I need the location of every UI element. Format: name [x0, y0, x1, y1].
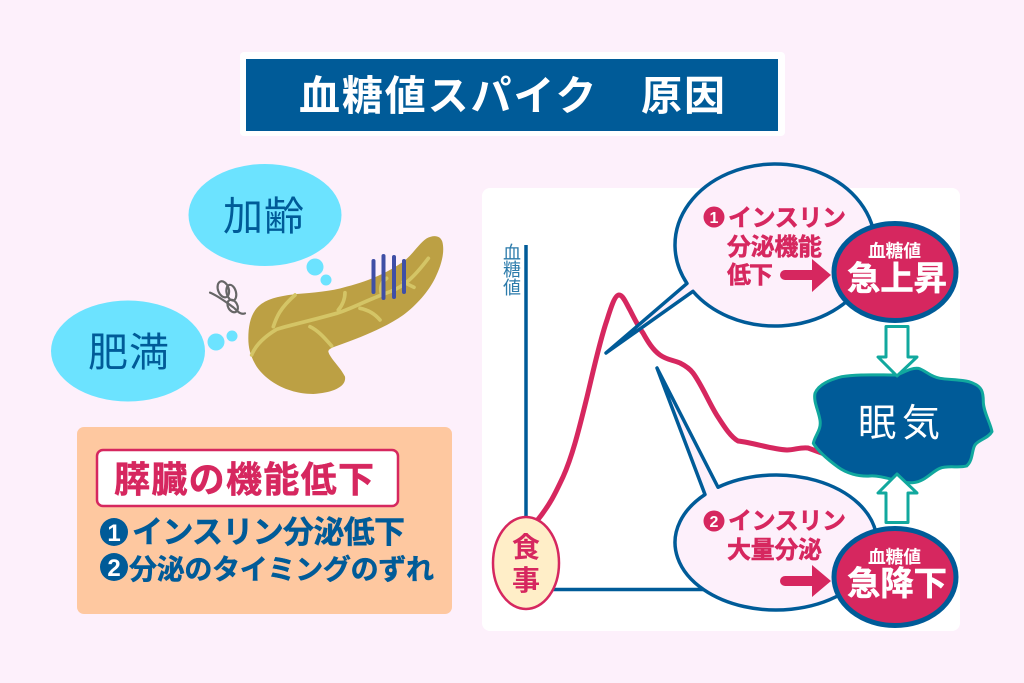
title: 血糖値スパイク 原因	[299, 73, 725, 119]
panel: drowsiness	[813, 368, 992, 483]
callout: insulin secretion decline: 分泌機能	[727, 234, 822, 261]
panel: drowsiness: 眠気	[858, 403, 940, 445]
callout: insulin secretion decline: 低下	[727, 262, 773, 289]
arrow: spike to drowsiness	[878, 326, 917, 376]
heading: 膵臓の機能低下	[97, 450, 398, 506]
list item 2: 分泌のタイミングのずれ	[129, 553, 434, 585]
arrow: to spike	[780, 259, 831, 292]
callout: large insulin secretion: 2	[710, 514, 719, 531]
icon: pancreas stress marks	[374, 256, 404, 298]
title	[240, 52, 785, 136]
meal marker: 食	[512, 532, 540, 563]
arrow: drop to drowsiness	[878, 474, 917, 522]
callout: large insulin secretion	[657, 368, 877, 610]
callout: insulin secretion decline: 1	[710, 210, 719, 227]
callout: large insulin secretion: 大量分泌	[727, 537, 822, 564]
callout: large insulin secretion: インスリン	[728, 508, 846, 535]
badge: 急上昇: 急上昇	[847, 261, 947, 298]
badge: 急降下: 血糖値	[868, 547, 921, 567]
badge: 急上昇: 血糖値	[868, 241, 921, 261]
y axis label	[503, 243, 521, 298]
thought bubble: 加齢	[188, 164, 342, 286]
arrow: to drop	[780, 565, 831, 597]
chart axes	[526, 245, 705, 590]
meal marker	[493, 517, 559, 609]
panel: pancreas function decline	[77, 427, 452, 614]
heading: 膵臓の機能低下: 膵臓の機能低下	[114, 459, 374, 500]
badge: 急上昇	[834, 224, 956, 320]
badge: 急降下: 急降下	[847, 566, 947, 603]
icon: pancreas	[248, 236, 443, 394]
thought bubble: 肥満	[51, 300, 238, 402]
badge: 急降下	[834, 528, 956, 626]
list item 1: 1	[107, 520, 121, 547]
icon: squiggle	[210, 280, 245, 314]
meal marker: 事	[512, 565, 540, 596]
blood sugar curve	[536, 295, 830, 522]
thought bubble: 加齢: 加齢	[223, 195, 304, 239]
list item 1: インスリン分泌低下	[132, 515, 405, 550]
callout: insulin secretion decline	[606, 164, 875, 353]
y axis label: 血	[503, 243, 521, 263]
thought bubble: 肥満: 肥満	[88, 331, 169, 375]
y axis label: 糖	[503, 260, 521, 280]
y axis label: 値	[503, 278, 521, 298]
panel: chart	[482, 164, 960, 631]
list item 2: 2	[107, 555, 121, 582]
callout: insulin secretion decline: インスリン	[728, 205, 846, 232]
